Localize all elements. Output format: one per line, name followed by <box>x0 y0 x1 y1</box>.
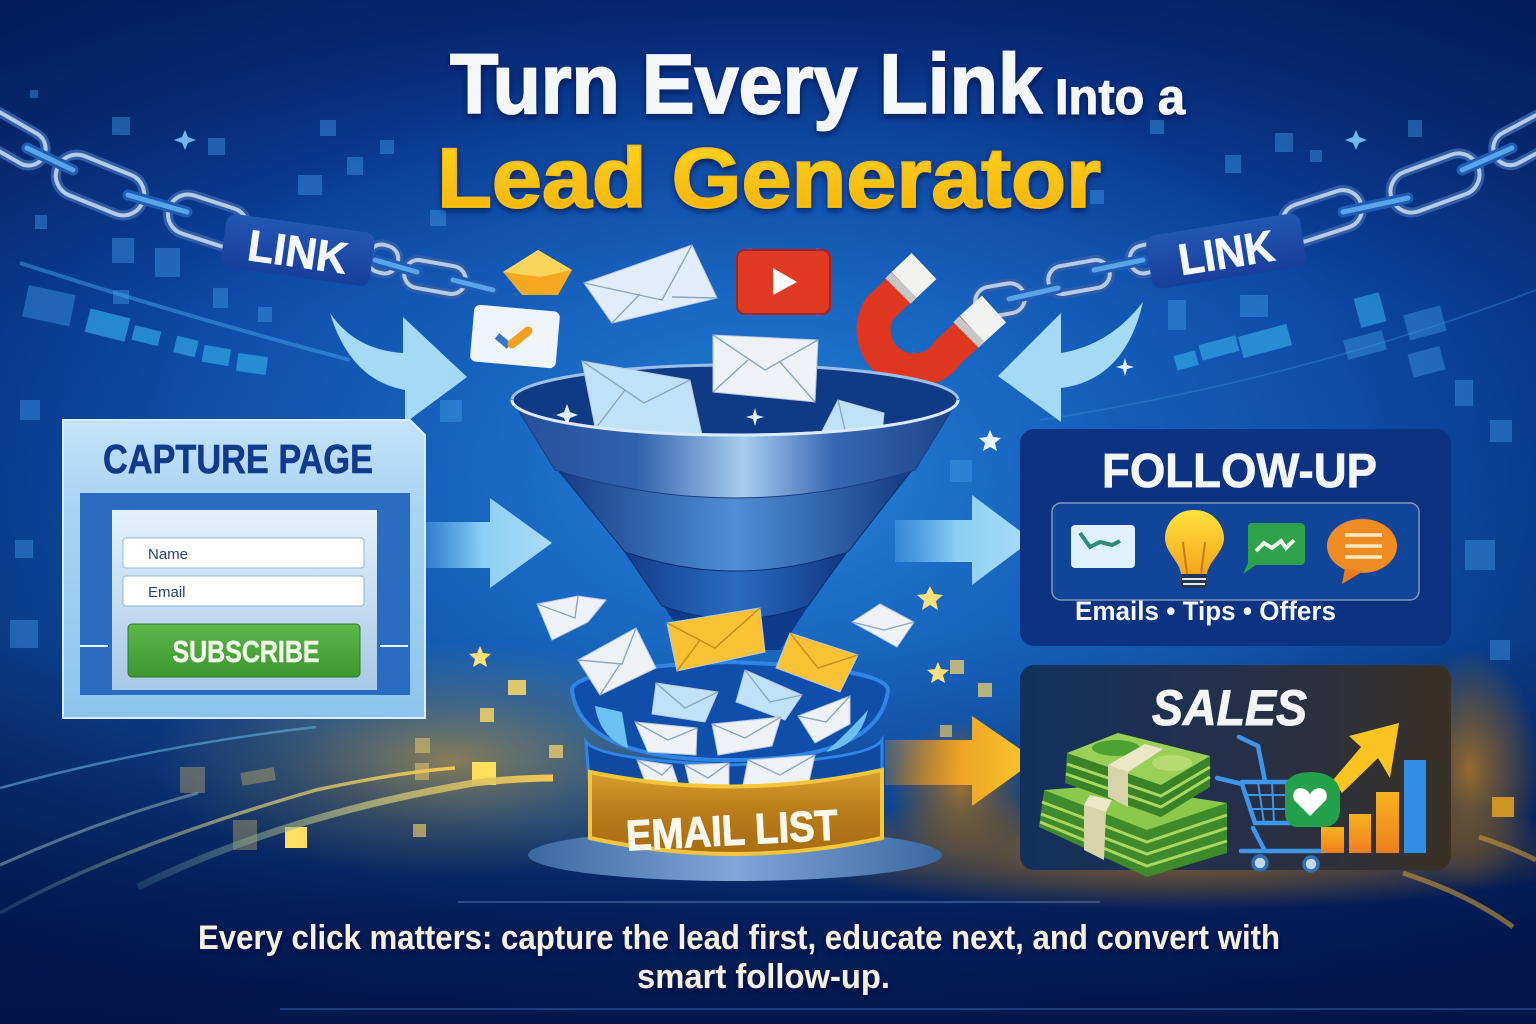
field: name <box>123 538 364 568</box>
icon: light bulb <box>1165 510 1224 588</box>
field: email <box>123 576 364 606</box>
icon: orange speech bubble <box>1327 519 1397 584</box>
link tag left <box>220 213 376 287</box>
label: email list: EMAIL LIST <box>625 801 839 861</box>
arrow: upper right curved <box>998 302 1143 422</box>
email list bowl <box>528 596 942 881</box>
platform <box>528 829 942 881</box>
right chain with link tag <box>973 94 1536 319</box>
stars <box>174 130 1367 683</box>
lower bowl <box>586 740 882 790</box>
button: subscribe <box>128 624 360 677</box>
icon: green chat <box>1243 523 1305 574</box>
icon: white card <box>470 304 560 369</box>
falling envelopes <box>582 245 884 435</box>
title <box>437 37 1186 225</box>
link tag right <box>1145 212 1307 290</box>
title: Lead Generator <box>437 131 1101 225</box>
funnel middle band <box>558 470 912 571</box>
panel: sales <box>1020 665 1451 877</box>
icon: money stacks <box>1039 733 1227 877</box>
heading: capture page: CAPTURE PAGE <box>103 436 373 482</box>
arrow: funnel to follow-up <box>895 495 1032 585</box>
funnel <box>512 245 958 650</box>
icon: magnet <box>874 266 994 370</box>
caption <box>198 919 1280 996</box>
badge: heart <box>1285 772 1340 827</box>
icon: yellow gem <box>503 250 572 295</box>
arrow: capture page to funnel <box>425 498 552 588</box>
title: Turn Every Link <box>450 37 1042 131</box>
collected envelopes <box>537 596 914 795</box>
text: emails tips offers: Emails • Tips • Offers <box>1075 596 1336 626</box>
field: email: Email <box>148 584 186 601</box>
left chain with link tag <box>0 92 493 296</box>
field: name: Name <box>148 546 188 563</box>
arrow: upper left curved <box>330 313 467 423</box>
gold label band <box>590 770 882 854</box>
caption: smart follow-up. <box>637 958 890 996</box>
funnel mouth <box>512 365 958 435</box>
link tag right: LINK <box>1175 222 1278 285</box>
caption: Every click matters: capture the lead first, educate next, and convert with <box>198 919 1280 957</box>
panel: follow-up <box>1020 429 1451 646</box>
funnel neck <box>660 600 812 650</box>
funnel upper band <box>512 400 958 498</box>
arrow: growth <box>1333 723 1399 793</box>
icon: shopping cart <box>1217 737 1323 871</box>
upper bowl <box>572 662 888 760</box>
icon: video play <box>737 250 830 314</box>
icon: email <box>1071 525 1135 568</box>
funnel lower band <box>620 545 852 619</box>
title: Into a <box>1055 69 1186 125</box>
heading: follow-up: FOLLOW-UP <box>1102 445 1377 498</box>
link tag left: LINK <box>245 221 351 284</box>
panel: capture page <box>63 420 425 718</box>
button: subscribe: SUBSCRIBE <box>172 634 320 669</box>
chart: rising bars <box>1321 760 1426 853</box>
heading: sales: SALES <box>1152 680 1307 736</box>
arrow: email list to sales <box>885 716 1036 806</box>
